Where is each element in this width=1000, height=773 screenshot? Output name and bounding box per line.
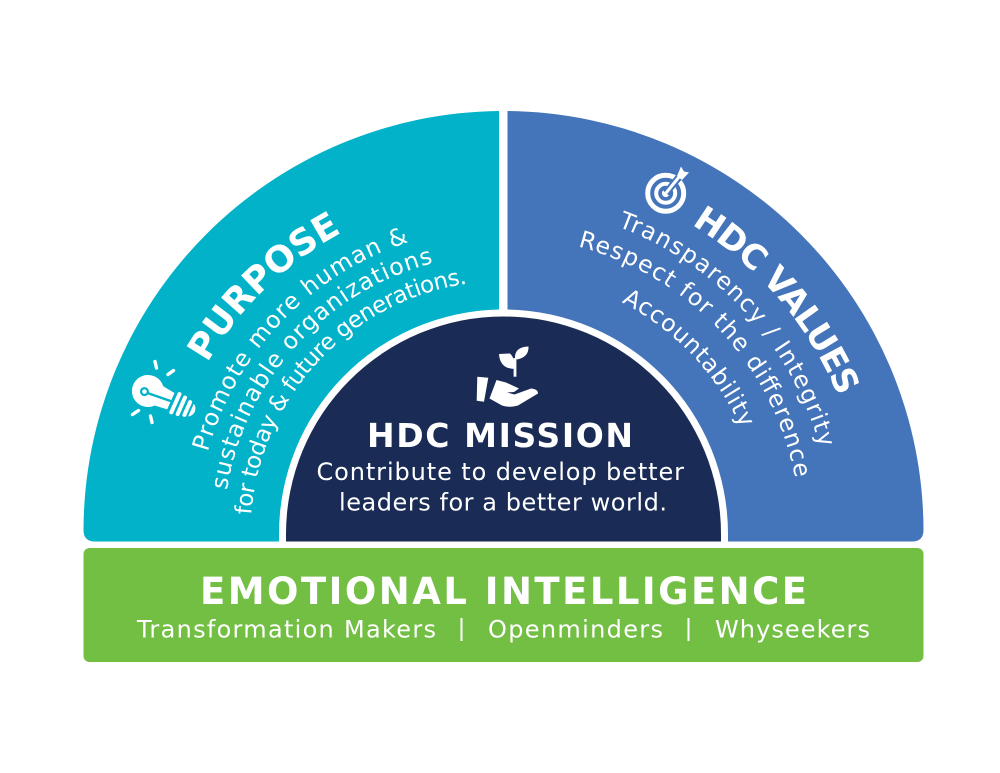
mission text: leaders for a better world. xyxy=(339,488,667,516)
icon: hand holding seedling xyxy=(477,346,538,407)
purpose heading: PURPOSE xyxy=(186,211,340,360)
values wedge xyxy=(508,111,924,542)
emotional intelligence heading: EMOTIONAL INTELLIGENCE xyxy=(200,570,807,613)
mission text: Contribute to develop better xyxy=(316,458,684,486)
values line: respect: Respect for the difference xyxy=(580,230,807,476)
values line: accountability: Accountability xyxy=(622,290,752,424)
mission text xyxy=(316,458,684,516)
panel: purpose xyxy=(84,111,499,542)
purpose text line 3: for today & future generations. xyxy=(234,272,465,514)
panel: values xyxy=(508,111,924,542)
values heading: HDC VALUES xyxy=(694,206,859,392)
purpose wedge xyxy=(84,111,499,542)
panel: emotional intelligence xyxy=(84,548,924,662)
values line: transparency and integrity: Transparency / Integrity xyxy=(623,210,832,444)
purpose text line 1: Promote more human & xyxy=(192,228,408,450)
purpose text line 2: sustainable organizations xyxy=(214,251,432,489)
green bar xyxy=(84,548,924,662)
label: whyseekers: Whyseekers xyxy=(715,616,870,644)
mission semicircle xyxy=(286,316,721,542)
icon: light bulb xyxy=(127,362,201,426)
label: transformation makers: Transformation Makers xyxy=(136,616,436,644)
label: openminders: Openminders xyxy=(488,616,663,644)
mission heading: HDC MISSION xyxy=(367,416,633,455)
icon: target with arrow xyxy=(648,166,689,211)
panel: mission xyxy=(286,316,721,542)
